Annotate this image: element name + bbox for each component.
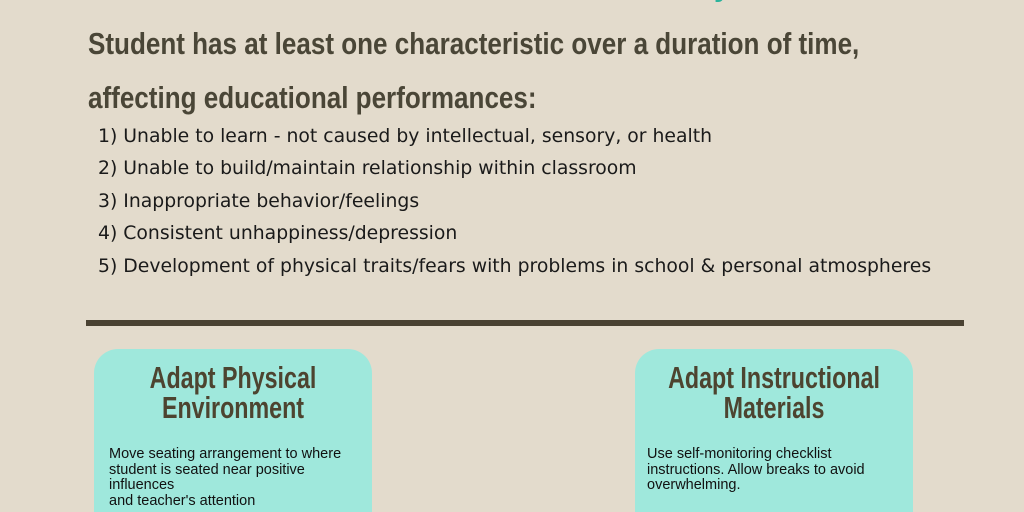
card title [668,360,880,425]
subheading: Student has at least one characteristic over a duration of time, [88,26,859,61]
card title [150,360,316,425]
list of characteristics: 4) Consistent unhappiness/depression [98,222,457,244]
card title: Materials [724,390,824,425]
panel: adapt physical environment [94,349,372,512]
list of characteristics: 1) Unable to learn - not caused by intellectual, sensory, or health [98,125,712,147]
subheading [88,26,859,115]
card title: Environment [162,390,304,425]
card body: Use self-monitoring checklist instructions. Allow breaks to avoid overwhelming. [647,446,865,493]
card body: and teacher's attention [109,492,255,508]
card title: Adapt Instructional [668,360,880,395]
panel: adapt instructional materials [635,349,913,512]
card title: Adapt Physical [150,360,316,395]
list of characteristics [98,125,931,277]
list of characteristics: 2) Unable to build/maintain relationship within classroom [98,157,637,179]
subheading: affecting educational performances: [88,80,537,115]
list of characteristics: 3) Inappropriate behavior/feelings [98,190,419,212]
card body: Move seating arrangement to where student is seated near positive influences [109,446,341,493]
list of characteristics: 5) Development of physical traits/fears with problems in school & personal atmospheres [98,255,931,277]
